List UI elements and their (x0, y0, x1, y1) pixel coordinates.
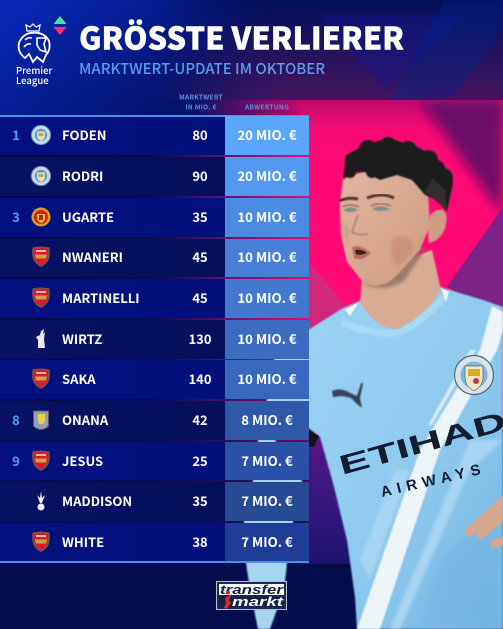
column header: abwertung: ABWERTUNG (244, 102, 289, 112)
column header: marktwert: IN MIO. € (185, 102, 217, 112)
row 9: 9 (12, 451, 20, 470)
ear (427, 210, 447, 243)
table (0, 115, 309, 563)
row 11: WHITE (62, 532, 104, 551)
row 1: 80 (192, 125, 208, 144)
row 3 (0, 198, 309, 237)
row 8 (0, 401, 309, 440)
transfermarkt logo: markt (232, 595, 284, 609)
row 1: 1 (12, 125, 20, 144)
stripes (357, 306, 503, 629)
row 10 (0, 482, 309, 521)
row 2: RODRI (62, 166, 103, 185)
shirt sponsor (336, 406, 503, 501)
premier league logo: Premier (16, 63, 52, 77)
row 9: JESUS (62, 451, 103, 470)
title: GRÖSSTE VERLIERER (79, 14, 404, 58)
brows (339, 195, 394, 201)
subtitle: MARKTWERT-UPDATE IM OKTOBER (79, 58, 325, 79)
hair (343, 137, 453, 211)
premier league logo: League (16, 73, 49, 87)
row 4: 45 (192, 247, 208, 266)
column header: marktwert: MARKTWERT (179, 92, 223, 102)
row 11: 7 MIO. € (241, 532, 293, 551)
row 10: 7 MIO. € (241, 491, 293, 510)
icon: up arrow (54, 16, 66, 24)
transfermarkt logo (216, 582, 286, 610)
face (340, 170, 430, 286)
row 5: 10 MIO. € (237, 288, 297, 307)
row 2: 90 (192, 166, 208, 185)
row 3: UGARTE (62, 207, 114, 226)
row 7 (0, 360, 309, 399)
table bottom line (0, 561, 309, 563)
hand (469, 500, 503, 544)
icon: down arrow (54, 27, 66, 35)
row 7: 10 MIO. € (237, 369, 297, 388)
row 6 (0, 320, 309, 359)
row 1: FODEN (62, 125, 106, 144)
row 9 (0, 442, 309, 480)
row 1: 20 MIO. € (237, 125, 297, 144)
row 10: MADDISON (62, 491, 132, 510)
row 3: 3 (12, 207, 20, 226)
row 9: 7 MIO. € (241, 451, 293, 470)
row 4: 10 MIO. € (237, 247, 297, 266)
neck (360, 250, 441, 329)
player photo: Foden (244, 137, 503, 629)
column header: marktwert (179, 92, 223, 112)
transfermarkt logo: transfer (220, 583, 285, 597)
row 8: 8 (12, 410, 20, 429)
premier league logo (16, 24, 52, 87)
sleeve shadow (309, 430, 319, 447)
arm behind table (244, 355, 309, 629)
row 10: 35 (192, 491, 208, 510)
row 4 (0, 239, 309, 277)
row 3: 35 (192, 207, 208, 226)
shirt (305, 287, 503, 629)
row 11 (0, 523, 309, 562)
row 6: 130 (188, 329, 212, 348)
badge (454, 356, 494, 394)
row 9: 25 (192, 451, 208, 470)
row 7: 140 (188, 369, 212, 388)
row 6: 10 MIO. € (237, 329, 297, 348)
eyes (343, 206, 390, 212)
table top line (0, 115, 309, 117)
nose and mouth (352, 215, 368, 235)
collar (342, 296, 445, 333)
row 5 (0, 279, 309, 318)
row 3: 10 MIO. € (237, 207, 297, 226)
row 11: 38 (192, 532, 208, 551)
puma logo (332, 383, 363, 408)
row 8: 42 (192, 410, 208, 429)
row 7: SAKA (62, 369, 96, 388)
row 1 (0, 116, 309, 155)
row 5: 45 (192, 288, 208, 307)
shirt sponsor: ETIHAD (336, 406, 503, 481)
row 8: 8 MIO. € (241, 410, 293, 429)
shirt sponsor: AIRWAYS (379, 461, 482, 501)
row 6: WIRTZ (62, 329, 102, 348)
row 8: ONANA (62, 410, 109, 429)
row 4: NWANERI (62, 247, 123, 266)
row 2: 20 MIO. € (237, 166, 297, 185)
row 5: MARTINELLI (62, 288, 140, 307)
row 2 (0, 157, 309, 196)
